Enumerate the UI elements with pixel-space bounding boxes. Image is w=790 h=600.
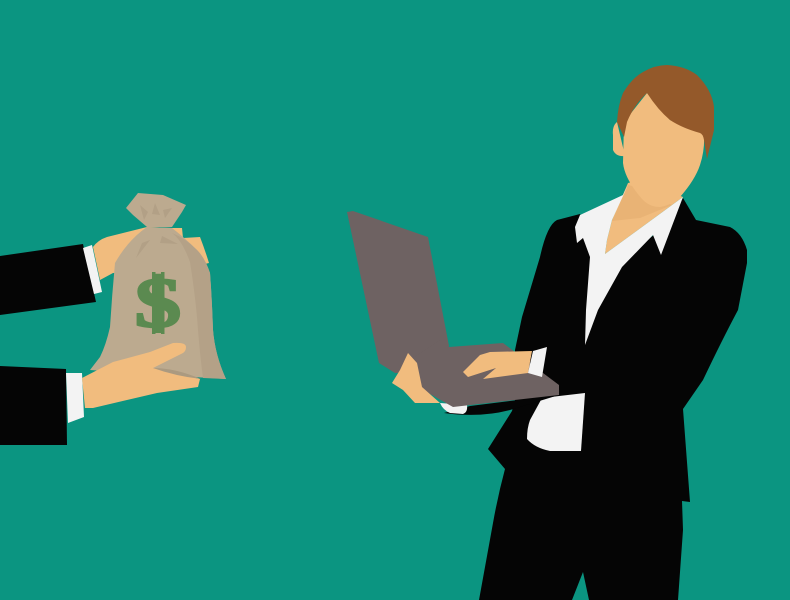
left hand under laptop [392, 353, 440, 403]
neck [605, 180, 683, 254]
lower shirt [527, 393, 585, 451]
left cuff under laptop [440, 403, 467, 414]
upper shirt and collar [575, 185, 683, 345]
bag body [90, 227, 226, 379]
upper cuff [83, 245, 102, 294]
laptop [347, 211, 559, 407]
trousers and jacket [479, 198, 747, 600]
bag neck frill [126, 193, 186, 227]
face [623, 93, 704, 207]
lower cuff [66, 373, 84, 423]
sleeve under laptop [444, 395, 559, 415]
back hand [93, 227, 209, 280]
neck shadow [612, 185, 672, 221]
palm shadow [153, 368, 201, 379]
money bag [90, 193, 226, 379]
right hand on keyboard [463, 351, 532, 379]
upper sleeve [0, 244, 96, 315]
figure: businesswoman with laptop [347, 65, 747, 600]
laptop screen [347, 211, 449, 373]
dollar sign: $ [134, 264, 182, 343]
bag right fold [172, 233, 226, 379]
hair [617, 65, 714, 159]
right cuff [528, 347, 547, 377]
bag creases [136, 203, 178, 258]
figure: left hands holding money bag [0, 193, 226, 445]
lower sleeve [0, 366, 67, 445]
ear [613, 122, 625, 156]
front hand [82, 343, 200, 408]
laptop base [410, 340, 559, 407]
